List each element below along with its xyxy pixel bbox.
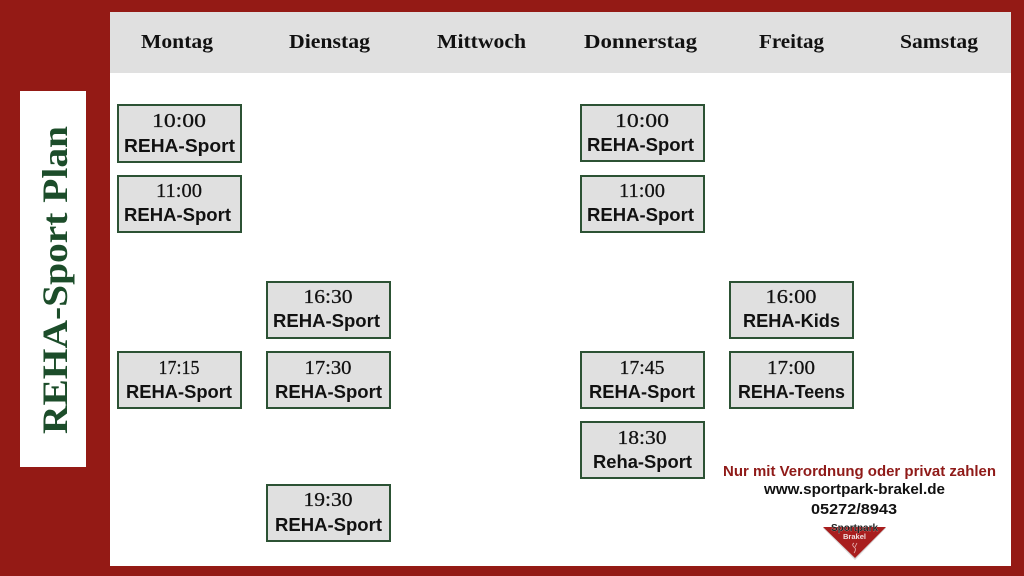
header: weekdays: Montag (141, 31, 213, 53)
logo: Sportpark Brakel: Sportpark (831, 523, 878, 534)
side title panel (20, 91, 86, 467)
Freitag 17:00: 17:00 (767, 357, 815, 379)
Dienstag 17:30 (267, 352, 390, 408)
Dienstag 16:30: REHA-Sport (273, 311, 380, 331)
note: prescription: Nur mit Verordnung oder privat zahlen (723, 463, 996, 480)
Donnerstag 10:00: 10:00 (615, 110, 669, 132)
Donnerstag 11:00: REHA-Sport (587, 205, 694, 225)
Donnerstag 10:00: REHA-Sport (587, 135, 694, 155)
header: weekdays: Freitag (759, 31, 824, 53)
Dienstag 16:30: 16:30 (304, 286, 352, 308)
Donnerstag 10:00 (581, 105, 704, 161)
Montag 10:00: 10:00 (152, 110, 206, 132)
Montag 17:15: 17:15 (158, 357, 200, 379)
Freitag 16:00: 16:00 (766, 286, 816, 308)
header: weekdays: Mittwoch (437, 31, 526, 53)
Donnerstag 18:30: 18:30 (618, 427, 666, 449)
Donnerstag 18:30: Reha-Sport (593, 452, 692, 472)
Donnerstag 18:30 (581, 422, 704, 478)
Donnerstag 17:45: 17:45 (620, 357, 664, 379)
Montag 11:00: 11:00 (156, 180, 202, 202)
Freitag 16:00: REHA-Kids (743, 311, 840, 331)
Freitag 16:00 (730, 282, 853, 338)
Dienstag 19:30 (267, 485, 390, 541)
Montag 11:00 (118, 176, 241, 232)
Montag 17:15 (118, 352, 241, 408)
Montag 17:15: REHA-Sport (126, 382, 232, 402)
Donnerstag 11:00: 11:00 (619, 180, 665, 202)
Dienstag 19:30: 19:30 (304, 489, 352, 511)
Freitag 17:00: REHA-Teens (738, 382, 845, 402)
header: weekdays (110, 12, 1011, 73)
logo: Sportpark Brakel: Brakel (843, 534, 866, 541)
phone: 05272/8943 (811, 501, 897, 518)
website: www.sportpark-brakel.de (763, 481, 945, 498)
Freitag 17:00 (730, 352, 853, 408)
Dienstag 19:30: REHA-Sport (275, 515, 382, 535)
header: weekdays: Donnerstag (584, 31, 697, 53)
Donnerstag 17:45 (581, 352, 704, 408)
Montag 10:00: REHA-Sport (124, 136, 235, 156)
logo: Sportpark Brakel (823, 523, 886, 560)
Montag 11:00: REHA-Sport (124, 205, 231, 225)
side title panel: REHA-Sport Plan (35, 126, 75, 434)
Dienstag 16:30 (267, 282, 390, 338)
Dienstag 17:30: REHA-Sport (275, 382, 382, 402)
Montag 10:00 (118, 105, 241, 162)
Dienstag 17:30: 17:30 (304, 357, 352, 379)
Donnerstag 17:45: REHA-Sport (589, 382, 695, 402)
header: weekdays: Samstag (900, 31, 978, 53)
header: weekdays: Dienstag (289, 31, 370, 53)
Donnerstag 11:00 (581, 176, 704, 232)
